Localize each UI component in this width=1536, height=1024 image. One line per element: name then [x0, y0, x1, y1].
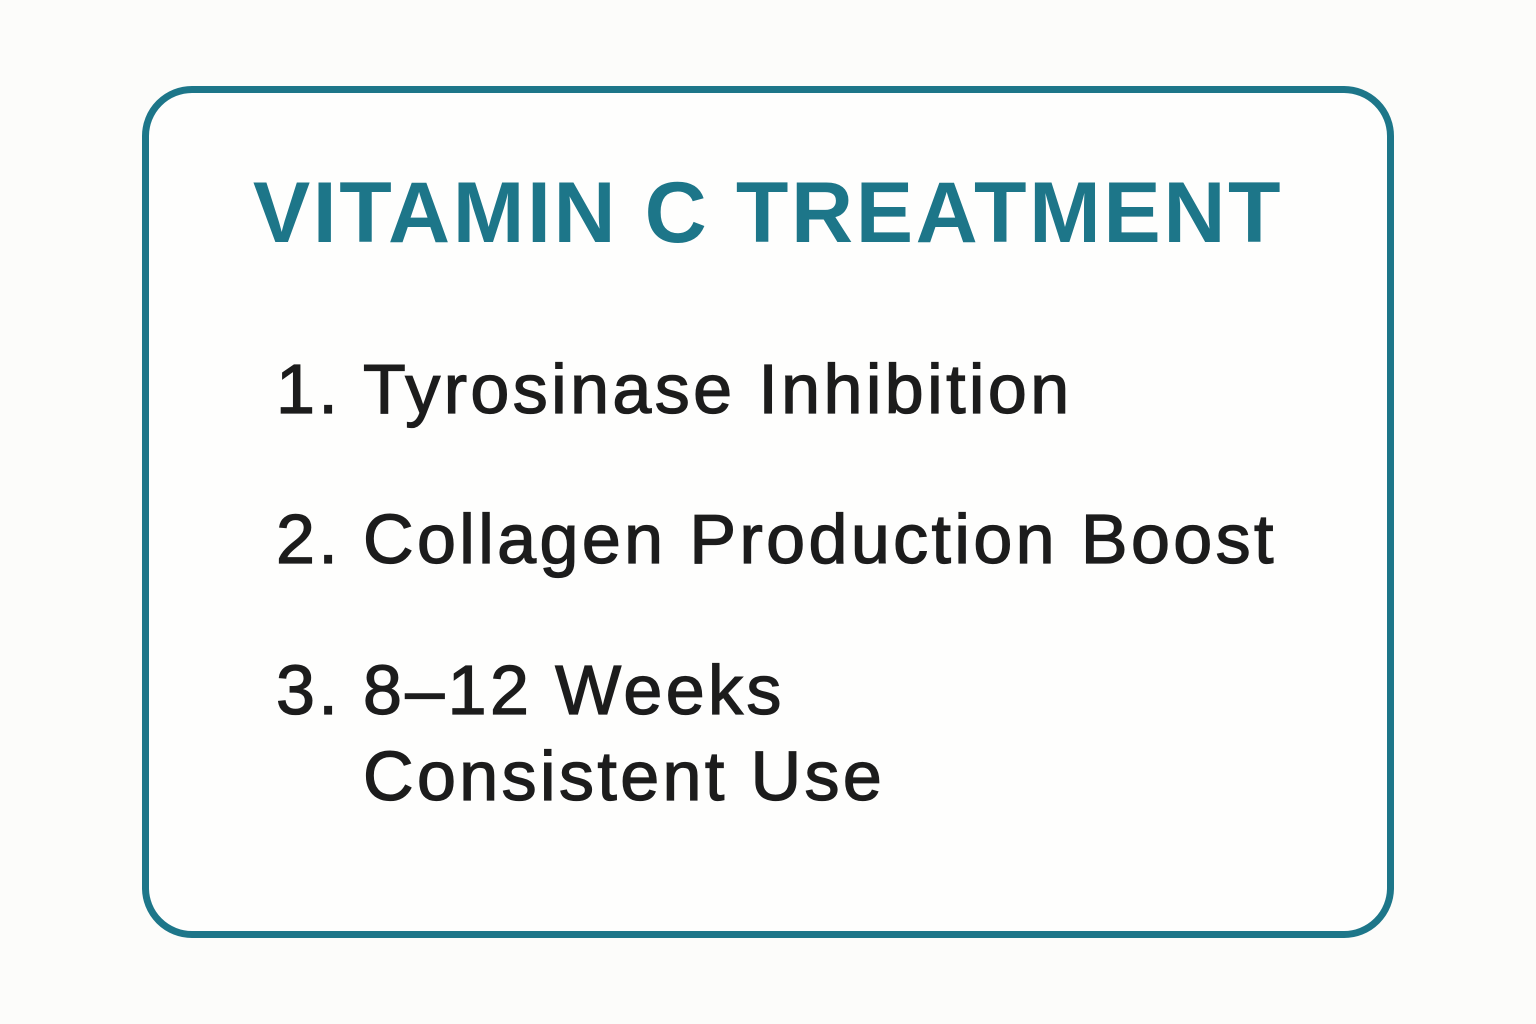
title: VITAMIN C TREATMENT — [253, 165, 1283, 261]
item 3: 3. — [276, 651, 341, 729]
item 1: 1. — [276, 350, 341, 428]
item 3 — [276, 651, 885, 815]
item 2: 2. — [276, 500, 341, 578]
item 3: 8–12 Weeks — [363, 651, 785, 729]
item 1: Tyrosinase Inhibition — [363, 350, 1073, 428]
item 2: Collagen Production Boost — [363, 500, 1277, 578]
panel: card — [142, 86, 1394, 938]
item 3: Consistent Use — [363, 737, 885, 815]
